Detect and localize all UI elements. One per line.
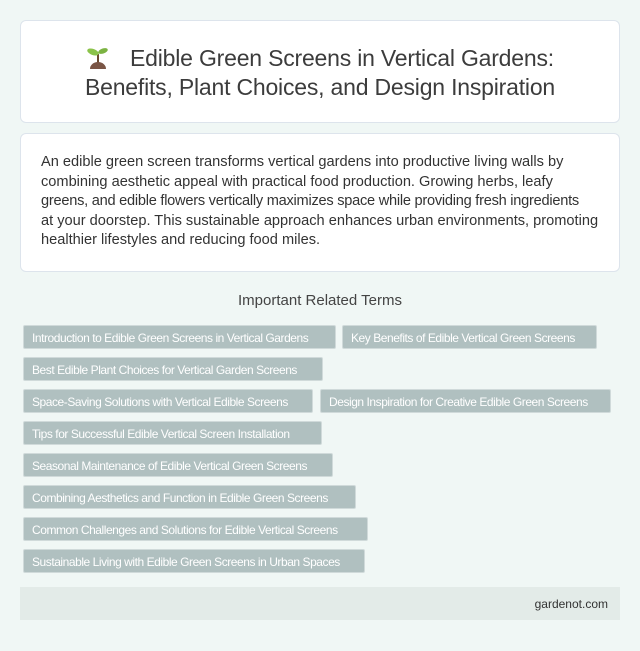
description text: combining aesthetic appeal with practical food production. Growing herbs, leafy (41, 174, 553, 190)
tag 7: Seasonal Maintenance of Edible Vertical Green Screens (32, 459, 307, 473)
tag 1 (23, 325, 336, 349)
tag 7 (23, 453, 333, 477)
description text (41, 154, 598, 248)
tag 9 (23, 517, 368, 541)
tag 3: Best Edible Plant Choices for Vertical Garden Screens (32, 363, 297, 377)
footer (20, 587, 620, 620)
tag 5 (320, 389, 611, 413)
tag 3 (23, 357, 323, 381)
tag 4: Space-Saving Solutions with Vertical Edible Screens (32, 395, 288, 409)
description text: at your doorstep. This sustainable approach enhances urban environments, promoting (41, 213, 598, 229)
tag 2: Key Benefits of Edible Vertical Green Screens (351, 331, 575, 345)
description text: An edible green screen transforms vertical gardens into productive living walls by (41, 154, 563, 170)
heading: related terms: Important Related Terms (238, 292, 402, 309)
description card (20, 133, 620, 272)
tag 10: Sustainable Living with Edible Green Screens in Urban Spaces (32, 555, 340, 569)
tag 4 (23, 389, 313, 413)
title: Benefits, Plant Choices, and Design Inspiration (85, 74, 555, 100)
tag 5: Design Inspiration for Creative Edible Green Screens (329, 395, 588, 409)
tag 6 (23, 421, 322, 445)
tag 1: Introduction to Edible Green Screens in Vertical Gardens (32, 331, 308, 345)
tag 8 (23, 485, 356, 509)
description text: greens, and edible flowers vertically maximizes space while providing fresh ingredients (41, 193, 579, 209)
tag 10 (23, 549, 365, 573)
title card (20, 20, 620, 123)
title (85, 45, 555, 100)
title: Edible Green Screens in Vertical Gardens: (130, 45, 554, 71)
icon: sprout (87, 48, 108, 69)
tag 8: Combining Aesthetics and Function in Edible Green Screens (32, 491, 328, 505)
tag 9: Common Challenges and Solutions for Edible Vertical Screens (32, 523, 338, 537)
tag 2 (342, 325, 597, 349)
description text: healthier lifestyles and reducing food miles. (41, 232, 320, 248)
footer text: gardenot.com (535, 597, 608, 611)
tag 6: Tips for Successful Edible Vertical Screen Installation (32, 427, 290, 441)
